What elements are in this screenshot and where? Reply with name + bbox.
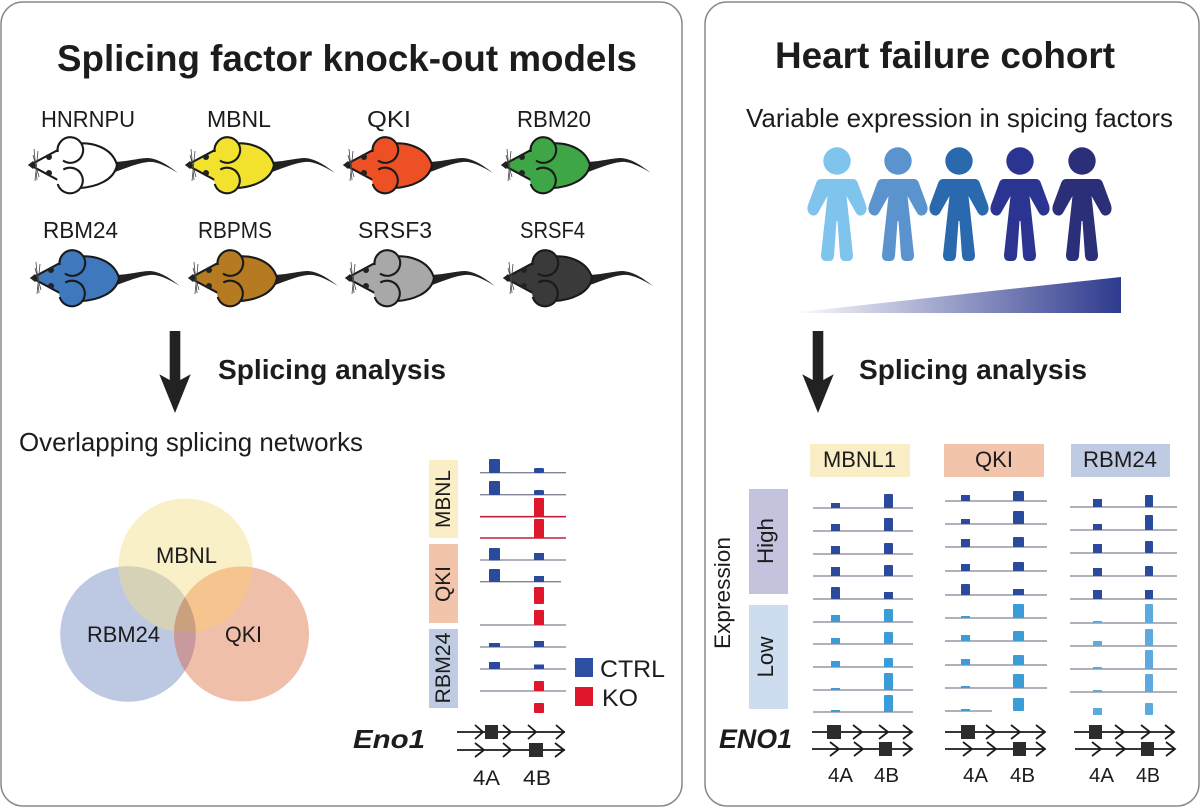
venn diagram	[60, 498, 309, 702]
panel: heart failure cohort	[705, 2, 1199, 806]
mouse: RBM20	[501, 106, 651, 193]
mouse: RBM24: RBM24	[43, 217, 118, 243]
gene model: Eno1 exons 4A and 4B: 4B	[523, 766, 551, 790]
gene model: MBNL1 column: 4A	[828, 764, 853, 787]
tracks: RBM24 column	[1070, 495, 1177, 715]
column header: MBNL1: MBNL1	[823, 447, 896, 472]
venn diagram: QKI	[225, 622, 262, 647]
group label: low	[749, 605, 788, 709]
column header: RBM24	[1071, 444, 1170, 477]
mouse: QKI	[343, 106, 493, 193]
label: MBNL	[429, 460, 458, 538]
column header: RBM24: RBM24	[1083, 447, 1157, 472]
tracks: MBNL1 column	[813, 494, 913, 712]
mouse: MBNL	[185, 106, 335, 193]
label: QKI	[429, 544, 458, 623]
group label: high: High	[753, 518, 778, 564]
legend: CTRL and KO: CTRL	[600, 656, 665, 683]
heading: knock-out models: Splicing factor knock-out models	[57, 38, 637, 79]
mouse: RBM20: RBM20	[517, 106, 591, 132]
column header: QKI	[944, 444, 1044, 477]
column header: MBNL1	[810, 444, 910, 477]
group label: high	[749, 489, 788, 594]
mouse: SRSF4: SRSF4	[520, 217, 585, 243]
mouse: SRSF3	[345, 217, 495, 306]
label: splicing analysis: Splicing analysis	[859, 354, 1087, 385]
text: variable expression: Variable expression in spicing factors	[746, 105, 1173, 133]
label: RBM24: RBM24	[432, 632, 455, 704]
gene model: QKI column: 4A	[963, 764, 988, 787]
column header: QKI: QKI	[975, 447, 1013, 472]
label: MBNL: MBNL	[432, 470, 455, 528]
group label: low: Low	[753, 636, 778, 678]
gene model: Eno1 exons 4A and 4B: 4A	[473, 766, 501, 790]
gene model: QKI column	[945, 725, 1045, 787]
mouse: HNRNPU: HNRNPU	[41, 106, 135, 132]
legend: CTRL and KO	[575, 656, 665, 712]
mouse: SRSF3: SRSF3	[358, 217, 432, 243]
tracks: QKI column	[945, 491, 1047, 711]
label: QKI: QKI	[432, 566, 455, 602]
people with increasing expression	[807, 147, 1112, 261]
panel: splicing factor knock-out models	[1, 2, 682, 806]
mouse: SRSF4	[503, 217, 653, 306]
mouse: QKI: QKI	[367, 106, 411, 132]
tracks: control and knock-out	[480, 459, 566, 713]
gene model: RBM24 column	[1074, 725, 1175, 787]
gene model: RBM24 column: 4B	[1136, 764, 1160, 787]
gene model: Eno1 exons 4A and 4B	[457, 725, 565, 790]
mouse: RBM24	[30, 217, 180, 306]
axis label: expression: Expression	[710, 537, 735, 649]
eno1 knock-out coverage tracks	[353, 459, 665, 790]
heading: heart failure cohort: Heart failure cohort	[775, 35, 1115, 76]
text: overlapping splicing networks: Overlapping splicing networks	[19, 429, 363, 457]
gradient wedge	[790, 277, 1121, 313]
arrow: down to splicing analysis	[802, 331, 834, 413]
gene model: MBNL1 column: 4B	[874, 764, 899, 787]
venn diagram: RBM24	[87, 622, 160, 647]
mouse models grid	[28, 106, 653, 306]
venn diagram: MBNL	[156, 543, 217, 568]
gene model: QKI column: 4B	[1010, 764, 1035, 787]
mouse: MBNL: MBNL	[207, 106, 271, 132]
mouse: HNRNPU	[28, 106, 178, 193]
gene label: ENO1: ENO1	[719, 724, 792, 754]
mouse: RBPMS	[188, 217, 338, 306]
label: splicing analysis: Splicing analysis	[218, 354, 446, 385]
mouse: RBPMS: RBPMS	[198, 217, 272, 243]
legend: CTRL and KO: KO	[602, 685, 638, 712]
gene model: RBM24 column: 4A	[1089, 764, 1114, 787]
gene model: MBNL1 column	[812, 725, 912, 787]
gene label: Eno1: Eno1	[353, 724, 425, 754]
arrow: down to splicing analysis	[159, 331, 191, 413]
